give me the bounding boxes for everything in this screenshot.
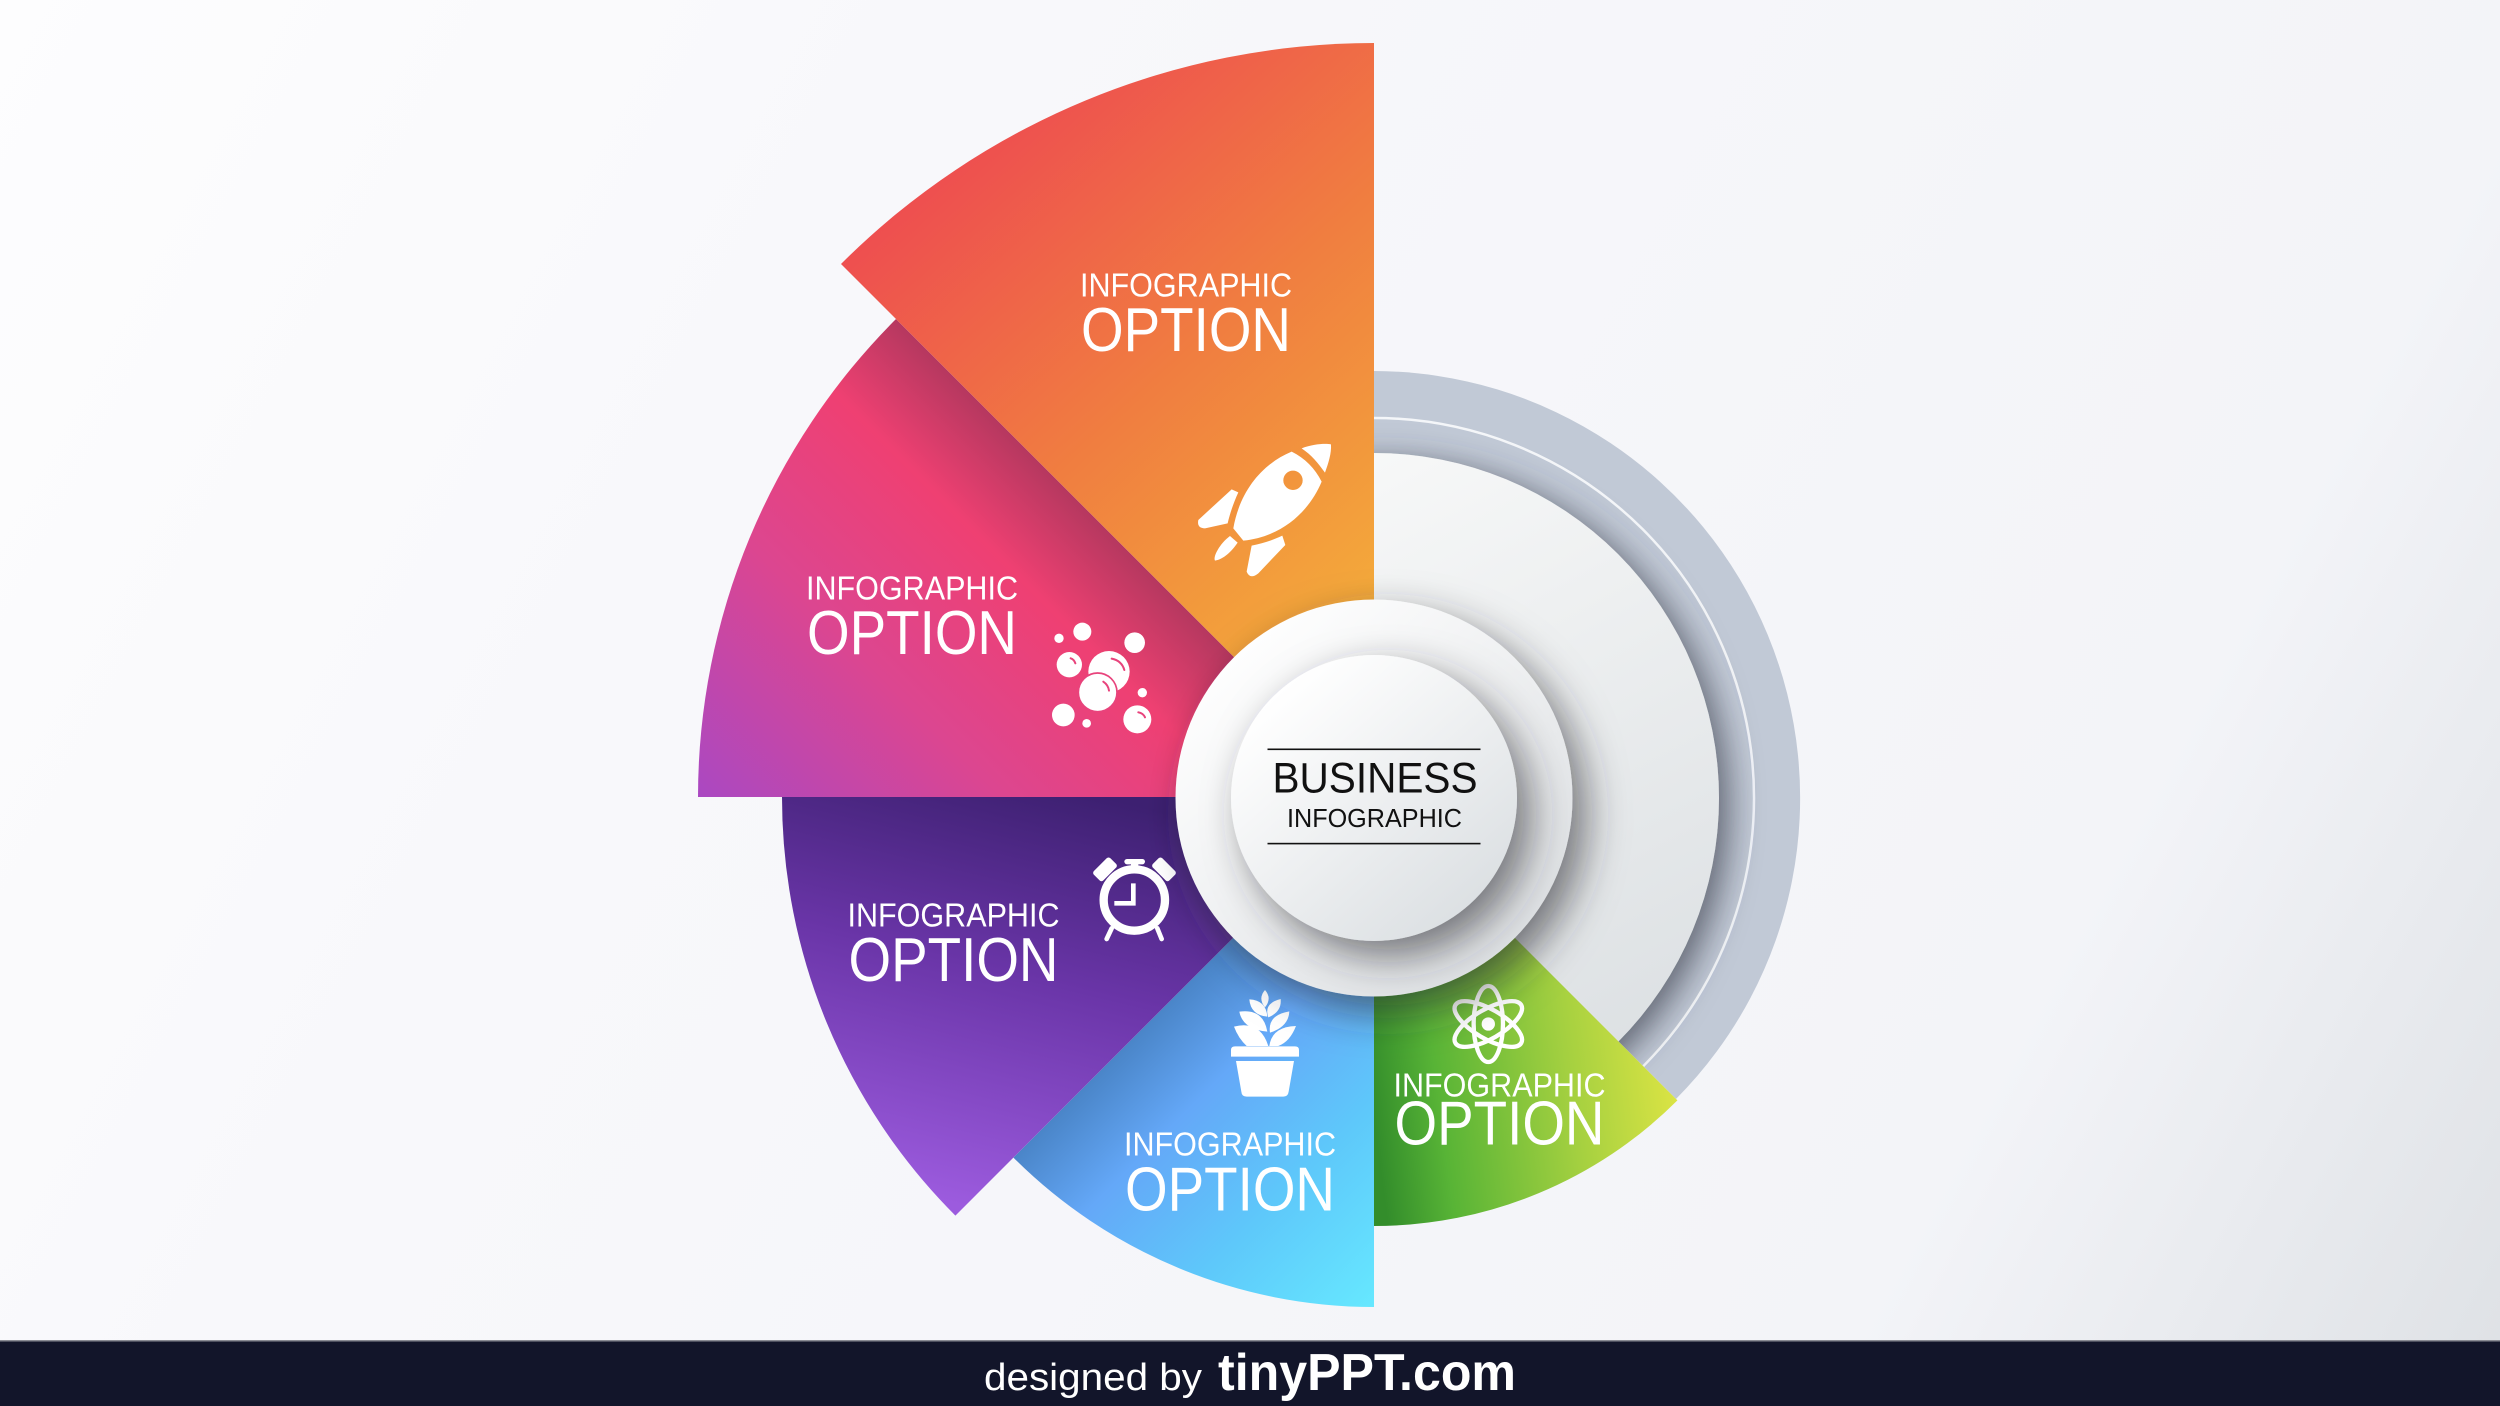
label: orange [1080,266,1292,365]
label: blue [1124,1126,1336,1224]
footer credit [984,1344,1516,1402]
grey ring and large disk [1374,371,1800,1099]
label: green: INFOGRAPHIC [1394,1066,1606,1104]
label: blue: INFOGRAPHIC [1124,1126,1336,1162]
footer credit: tinyPPT.com [1218,1344,1516,1402]
footer credit: designed by [984,1357,1202,1399]
label: pink: INFOGRAPHIC [806,570,1018,606]
title: business infographic: INFOGRAPHIC [1287,803,1462,833]
icon: atom [1448,986,1529,1062]
icon: potted plant [1231,990,1299,1097]
label: purple: INFOGRAPHIC [848,896,1060,934]
title: business infographic: BUSINESS [1272,754,1478,802]
center disk with title [1231,655,1517,941]
title: business infographic [1268,748,1480,844]
footer bar [0,1340,2500,1406]
icon: bubbles [1052,623,1151,733]
label: purple: OPTION [848,926,1058,995]
medium disk [1176,600,1572,996]
label: green [1394,1066,1606,1158]
segment: pink [698,319,1374,797]
label: pink [806,570,1018,668]
label: orange: INFOGRAPHIC [1080,266,1292,304]
label: orange: OPTION [1081,296,1291,365]
label: pink: OPTION [807,599,1017,668]
label: green: OPTION [1394,1090,1604,1158]
segment: orange [841,43,1374,797]
label: purple [848,896,1060,995]
segment: purple [782,797,1374,1216]
label: blue: OPTION [1125,1156,1335,1224]
segment: blue [1013,797,1374,1307]
segment: green [1374,797,1677,1226]
icon: rocket [1198,444,1331,576]
icon: alarm clock [1092,856,1177,939]
